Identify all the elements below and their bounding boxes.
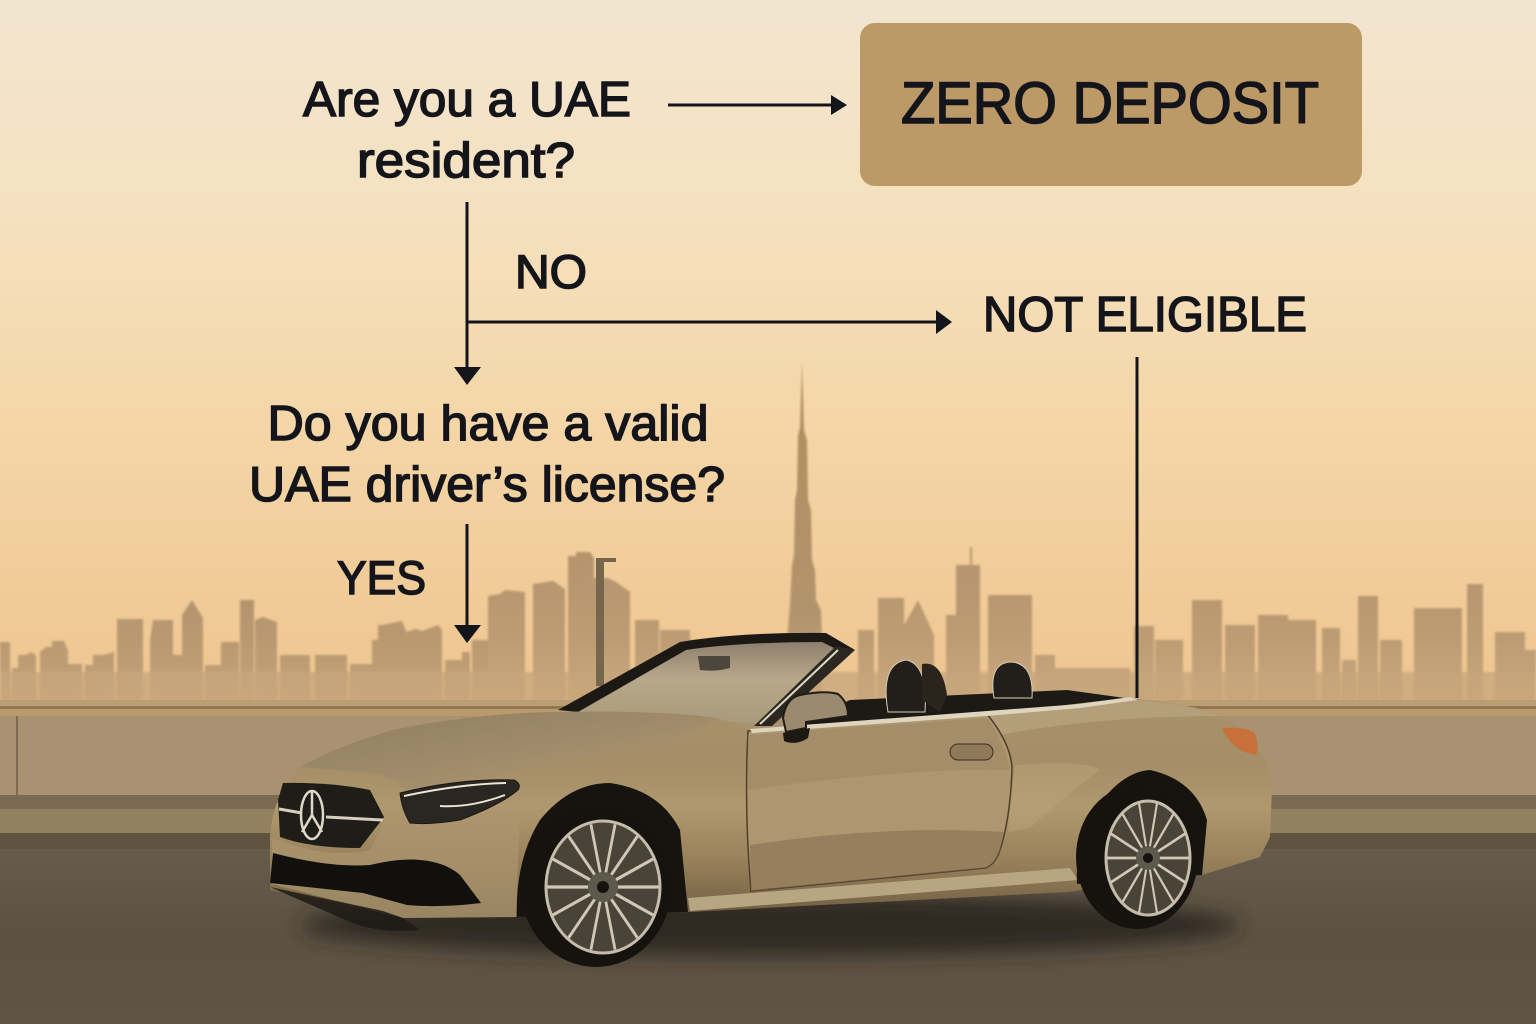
- front wheel: [520, 803, 672, 967]
- label: YES: YES: [337, 551, 426, 604]
- road: [0, 849, 1536, 1024]
- rear deck highlight: [990, 700, 1222, 735]
- front wheel arch: [517, 783, 688, 917]
- question: UAE resident: resident?: [357, 134, 575, 188]
- question: driver's license: UAE driver’s license?: [249, 458, 725, 512]
- label: NO: NO: [515, 245, 587, 298]
- line: not eligible to car: [1136, 357, 1138, 698]
- skyline: [0, 362, 1536, 704]
- question: UAE resident: Are you a UAE: [303, 73, 631, 127]
- front grille: [278, 783, 384, 848]
- arrow: down to license question: [454, 202, 481, 385]
- arrow: to zero deposit: [668, 95, 847, 115]
- car: [270, 633, 1272, 967]
- chin splitter: [270, 887, 420, 931]
- question: UAE resident: [303, 73, 631, 188]
- question: driver's license: [249, 397, 725, 512]
- result: not eligible: NOT ELIGIBLE: [983, 288, 1307, 342]
- rear quarter sheen: [1008, 763, 1100, 832]
- car shadow: [300, 895, 1240, 955]
- door handle: [950, 744, 993, 760]
- door: [747, 714, 1012, 891]
- tower: Burj Khalifa: [786, 362, 822, 695]
- arrow: yes down to car: [454, 524, 481, 643]
- Mercedes badge: [301, 791, 323, 839]
- rear wheel: [1076, 785, 1198, 929]
- rear wheel arch: [1077, 770, 1207, 884]
- trim stripe: [750, 697, 1137, 733]
- sill: [688, 868, 1078, 911]
- barrier wall: [0, 700, 1536, 849]
- windshield: [558, 633, 855, 726]
- zero deposit box: ZERO DEPOSIT: [901, 71, 1319, 136]
- street lamp post: [596, 558, 616, 686]
- taillight: [1222, 728, 1258, 755]
- chrome bar: [279, 809, 383, 820]
- lower air intake: [270, 853, 481, 906]
- arrow: to not eligible: [467, 310, 952, 334]
- car body: [270, 699, 1272, 918]
- zero deposit box: [860, 23, 1362, 186]
- side mirror: [783, 692, 848, 743]
- door reflections: [748, 718, 1010, 790]
- headlight: [400, 780, 519, 824]
- hood: [300, 712, 717, 790]
- seats and cabin: [800, 660, 1125, 728]
- bumper fascia: [272, 812, 520, 918]
- question: driver's license: Do you have a valid: [268, 397, 708, 451]
- background: sky: [0, 0, 1536, 710]
